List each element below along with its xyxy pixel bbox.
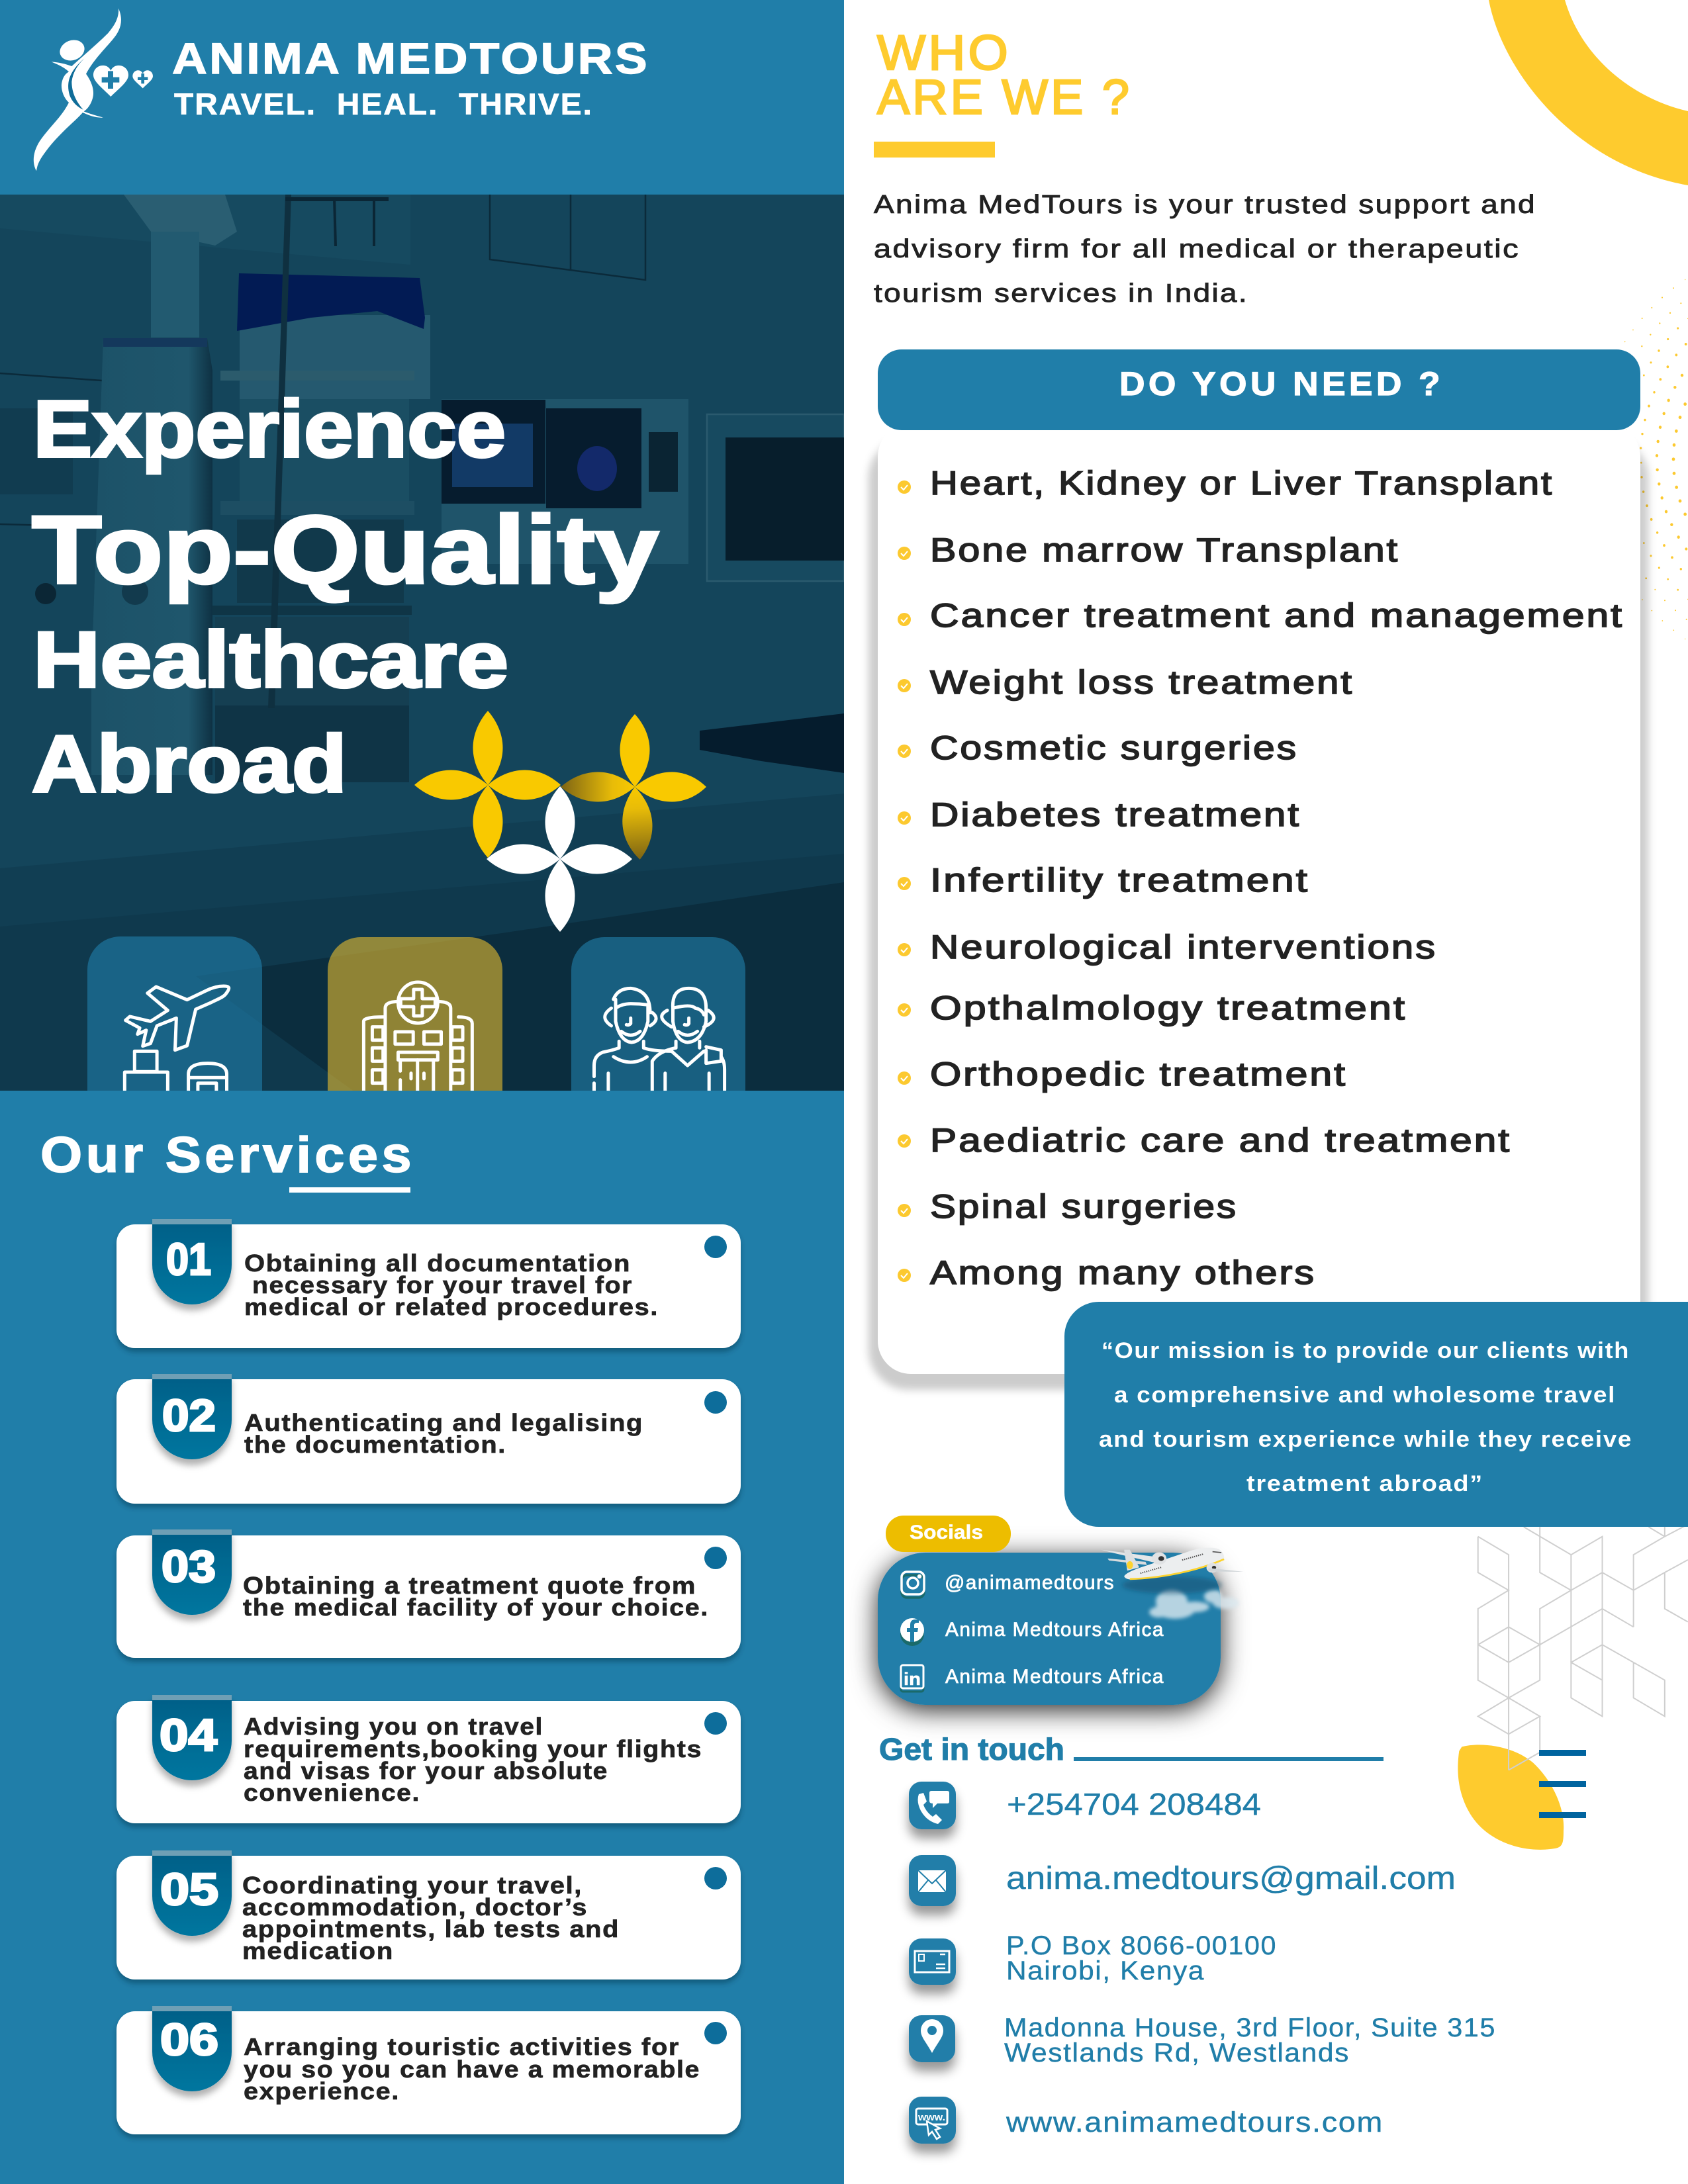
icon tiles row bbox=[87, 936, 745, 1091]
panel: socials bbox=[878, 1516, 1244, 1705]
icon: dancer figure with hearts bbox=[34, 9, 153, 171]
callout: mission bbox=[1064, 1302, 1688, 1527]
list header bbox=[878, 349, 1640, 430]
decorative yellow leaf bbox=[1458, 1745, 1564, 1850]
list items: Neurological interventions bbox=[930, 929, 1437, 966]
heading: who are we: WHO bbox=[877, 25, 1011, 80]
intro text: advisory firm for all medical or therapeutic bbox=[874, 235, 1520, 263]
title line 3: Healthcare bbox=[33, 615, 508, 704]
heading: our services: Our Services bbox=[40, 1127, 415, 1183]
street address: Westlands Rd, Westlands bbox=[1004, 2038, 1350, 2068]
list items: Spinal surgeries bbox=[930, 1188, 1238, 1225]
title line 4: Abroad bbox=[32, 719, 347, 809]
website url: www.animamedtours.com bbox=[1006, 2107, 1383, 2138]
service card 06 bbox=[117, 2006, 741, 2134]
linkedin name: Anima Medtours Africa bbox=[945, 1666, 1164, 1688]
list items: Infertility treatment bbox=[930, 862, 1309, 899]
list items: Cosmetic surgeries bbox=[930, 729, 1298, 766]
contact: po box bbox=[909, 1931, 1277, 1985]
list items: Heart, Kidney or Liver Transplant bbox=[930, 465, 1554, 502]
title line 2: Top-Quality bbox=[32, 496, 659, 604]
service card 03 bbox=[117, 1529, 741, 1658]
callout: mission: a comprehensive and wholesome travel bbox=[1114, 1383, 1616, 1408]
list items: Orthopedic treatment bbox=[930, 1056, 1347, 1093]
contact: phone bbox=[909, 1782, 1261, 1829]
po box address: Nairobi, Kenya bbox=[1006, 1956, 1205, 1985]
panel: left column bbox=[0, 0, 844, 2184]
icon: www cursor: www. bbox=[917, 2112, 945, 2123]
decorative menu bars bbox=[1539, 1750, 1586, 1818]
service card 05: medication bbox=[242, 1937, 394, 1964]
service card 03: the medical facility of your choice. bbox=[243, 1594, 709, 1621]
service card 01 bbox=[117, 1219, 741, 1348]
header logo bbox=[34, 9, 649, 171]
service card 01: necessary for your travel for bbox=[252, 1271, 633, 1298]
title line 1: Experience bbox=[33, 384, 506, 474]
heading: who are we: ARE WE ? bbox=[877, 69, 1132, 124]
street address bbox=[1004, 2013, 1496, 2068]
socials box bbox=[878, 1553, 1221, 1705]
panel: socials: Socials bbox=[910, 1522, 983, 1543]
list card bbox=[878, 424, 1640, 1374]
icon: phone bbox=[909, 1782, 956, 1829]
intro text bbox=[874, 191, 1536, 308]
contact: email bbox=[909, 1855, 1456, 1906]
service card 05: accommodation, doctor’s bbox=[242, 1893, 588, 1921]
callout: mission: treatment abroad” bbox=[1246, 1471, 1483, 1496]
tile: hospital bbox=[328, 937, 502, 1091]
cloud bbox=[1149, 1590, 1239, 1619]
service card 02: the documentation. bbox=[244, 1431, 506, 1458]
po box address: P.O Box 8066-00100 bbox=[1006, 1931, 1277, 1960]
panel: services section background bbox=[0, 1091, 844, 2184]
service card 04: and visas for your absolute bbox=[244, 1757, 608, 1784]
contact: location bbox=[909, 2013, 1496, 2068]
service card 03: 03 bbox=[162, 1541, 216, 1592]
icon: mail bbox=[909, 1855, 956, 1906]
email address: anima.medtours@gmail.com bbox=[1006, 1861, 1456, 1896]
icon: postcard bbox=[909, 1938, 956, 1985]
tagline: TRAVEL. HEAL. THRIVE. bbox=[174, 87, 593, 121]
service card 05: 05 bbox=[160, 1864, 218, 1915]
brand name: ANIMA MEDTOURS bbox=[172, 34, 649, 83]
decorative yellow arc bbox=[1489, 0, 1688, 185]
heading: get in touch bbox=[879, 1732, 1383, 1766]
list card shadow bbox=[868, 438, 1648, 1390]
list items: Among many others bbox=[930, 1254, 1316, 1291]
service card 05 bbox=[117, 1850, 741, 1979]
icon: facebook bbox=[900, 1618, 924, 1646]
service card 04: convenience. bbox=[244, 1779, 420, 1806]
service card 05: appointments, lab tests and bbox=[242, 1915, 620, 1942]
service card 05: Coordinating your travel, bbox=[242, 1872, 583, 1899]
service card 04: requirements,booking your flights bbox=[244, 1735, 702, 1762]
contact: website bbox=[909, 2097, 1383, 2144]
hero photo: operating room bbox=[0, 195, 844, 1092]
service card 01: medical or related procedures. bbox=[244, 1293, 659, 1320]
icon: linkedin bbox=[901, 1665, 923, 1692]
socials tag bbox=[886, 1516, 1011, 1552]
service card 06: you so you can have a memorable bbox=[244, 2056, 700, 2083]
icon: instagram bbox=[902, 1572, 924, 1598]
street address: Madonna House, 3rd Floor, Suite 315 bbox=[1004, 2013, 1496, 2042]
heading: who are we bbox=[874, 25, 1132, 158]
phone number: +254704 208484 bbox=[1007, 1787, 1261, 1821]
list items bbox=[898, 465, 1624, 1291]
service card 01: 01 bbox=[166, 1234, 211, 1285]
service card 01: Obtaining all documentation bbox=[244, 1250, 631, 1277]
tile: travel bbox=[87, 936, 262, 1091]
service card 06: 06 bbox=[160, 2015, 218, 2065]
service card 04 bbox=[117, 1695, 741, 1823]
service card 04: 04 bbox=[160, 1710, 217, 1760]
list items: Opthalmology treatment bbox=[930, 989, 1407, 1026]
list items: Diabetes treatment bbox=[930, 796, 1301, 833]
geometric line pattern bbox=[1478, 1524, 1688, 1770]
intro text: tourism services in India. bbox=[874, 279, 1248, 308]
icon: linkedin: in bbox=[904, 1669, 921, 1689]
facebook name: Anima Medtours Africa bbox=[945, 1619, 1164, 1641]
service card 02: Authenticating and legalising bbox=[244, 1409, 643, 1436]
instagram handle: @animamedtours bbox=[945, 1572, 1115, 1594]
service card 06: experience. bbox=[244, 2077, 400, 2105]
intro text: Anima MedTours is your trusted support and bbox=[874, 191, 1536, 219]
service card 02: 02 bbox=[162, 1390, 216, 1441]
po box address bbox=[1006, 1931, 1277, 1985]
list items: Weight loss treatment bbox=[930, 664, 1354, 701]
flower ornament bbox=[414, 711, 706, 932]
service card 02 bbox=[117, 1374, 741, 1504]
tile: people bbox=[571, 937, 745, 1091]
service card 03: Obtaining a treatment quote from bbox=[243, 1572, 696, 1599]
service card 06: Arranging touristic activities for bbox=[244, 2033, 680, 2060]
icon: map pin bbox=[909, 2015, 955, 2062]
list items: Bone marrow Transplant bbox=[930, 531, 1399, 569]
heading: get in touch: Get in touch bbox=[879, 1732, 1064, 1766]
hero title bbox=[32, 384, 659, 809]
decorative dots bbox=[1624, 279, 1688, 639]
service card 04: Advising you on travel bbox=[244, 1713, 543, 1740]
callout: mission: “Our mission is to provide our clients with bbox=[1102, 1338, 1630, 1363]
list heading: DO YOU NEED ? bbox=[1119, 365, 1444, 402]
airplane bbox=[1101, 1548, 1244, 1594]
list items: Cancer treatment and management bbox=[930, 597, 1624, 634]
list items: Paediatric care and treatment bbox=[930, 1122, 1511, 1159]
panel: do you need list bbox=[868, 349, 1648, 1390]
callout: mission: and tourism experience while they receive bbox=[1099, 1427, 1632, 1452]
icon: www cursor bbox=[909, 2097, 956, 2144]
